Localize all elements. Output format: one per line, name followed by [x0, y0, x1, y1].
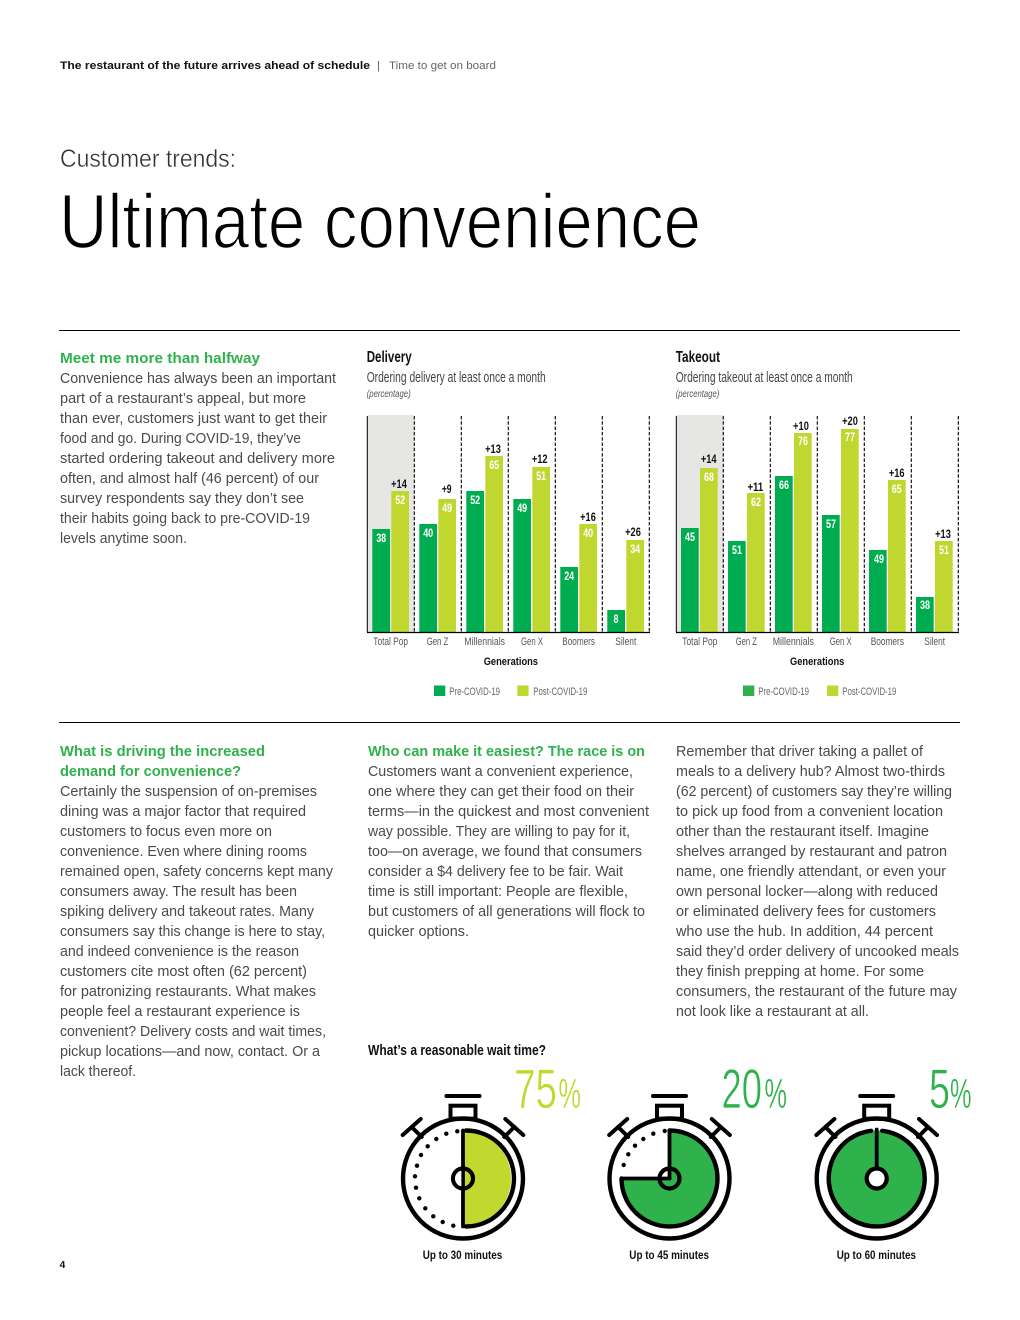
page header: The restaurant of the future arrives ahead of schedule	[60, 60, 370, 72]
axis title: Generations	[790, 656, 844, 668]
subtitle: Customer trends:	[60, 145, 236, 173]
body text: way possible. They are willing to pay for it,	[367, 824, 630, 840]
panel: pickup hub text: to pick up food from a convenient location	[676, 804, 943, 820]
body text: convenience. Even where dining rooms	[60, 844, 307, 860]
body text: their habits going back to pre-COVID-19	[60, 511, 310, 527]
body text: time is still important: People are flexible,	[368, 884, 628, 900]
heading: Meet me more than halfway	[60, 351, 260, 367]
body text: and indeed convenience is the reason	[60, 944, 299, 960]
panel: pickup hub text: other than the restaurant itself. Imagine	[676, 824, 929, 840]
panel: pickup hub text: consumers, the restaurant of the future may	[676, 984, 958, 1000]
legend	[434, 686, 587, 698]
heading: What is driving the increased	[60, 744, 265, 760]
body text: convenient? Delivery costs and wait times,	[60, 1024, 326, 1040]
panel: meet me more than halfway	[60, 351, 336, 547]
body text: dining was a major factor that required	[60, 804, 306, 820]
chart heading: Ordering takeout at least once a month	[676, 369, 853, 386]
wait time heading: What’s a reasonable wait time?	[368, 1042, 546, 1059]
axis labels: Gen X	[521, 636, 543, 648]
body text: remained open, safety concerns kept many	[60, 864, 334, 880]
legend: Post-COVID-19	[842, 686, 896, 698]
title: Ultimate convenience	[59, 179, 701, 265]
stat: 75 percent: 75	[514, 1057, 557, 1120]
bars: millennials: 52	[470, 493, 480, 507]
chart heading: Delivery	[367, 349, 412, 366]
bars: boomers: 24	[564, 569, 574, 583]
axis labels	[682, 636, 945, 648]
body text: started ordering takeout and delivery more	[60, 451, 335, 467]
body text	[367, 764, 649, 940]
axis labels: Boomers	[871, 636, 904, 648]
panel: pickup hub text: (62 percent) of customers say they’re willing	[676, 784, 952, 800]
bars: millennials	[466, 442, 503, 632]
stat: 75 percent: %	[558, 1070, 581, 1117]
chart heading: (percentage)	[367, 388, 411, 400]
panel: pickup hub text: shelves arranged by restaurant and patron	[676, 844, 947, 860]
axis title: Generations	[484, 656, 538, 668]
bars: gen x: 51	[536, 469, 546, 483]
body text: lack thereof.	[60, 1064, 136, 1080]
bars: total pop: 52	[395, 493, 405, 507]
panel: pickup hub text	[675, 744, 959, 1020]
icon: stopwatch 45 minutes	[609, 1096, 730, 1238]
axis labels: Millennials	[773, 636, 814, 648]
heading: demand for convenience?	[60, 764, 241, 780]
axis labels: Silent	[615, 636, 636, 648]
body text: consumers say this change is here to stay,	[60, 924, 325, 940]
bars: total pop: 68	[704, 470, 714, 484]
panel: what is driving demand	[60, 744, 334, 1080]
bars: boomers	[869, 466, 906, 632]
label: up to 60 minutes: Up to 60 minutes	[837, 1248, 916, 1262]
stat: 5 percent: %	[950, 1070, 972, 1117]
bars: boomers: +16	[889, 466, 905, 480]
panel: pickup hub text: Remember that driver taking a pallet of	[676, 744, 924, 760]
bars: gen x: 57	[826, 517, 836, 531]
body text: food and go. During COVID-19, they’ve	[60, 431, 301, 447]
axis labels: Silent	[924, 636, 945, 648]
panel: pickup hub text: own personal locker—along with reduced	[676, 884, 938, 900]
body text: levels anytime soon.	[60, 531, 187, 547]
body text: Customers want a convenient experience,	[368, 764, 633, 780]
stat: 5 percent: 5	[929, 1057, 950, 1120]
panel: pickup hub text: meals to a delivery hub? Almost two-thirds	[676, 764, 945, 780]
label: up to 30 minutes: Up to 30 minutes	[423, 1248, 503, 1262]
panel: who can make it easiest	[367, 744, 649, 940]
panel: pickup hub text: said they’d order delivery of uncooked meals	[676, 944, 959, 960]
bars: millennials	[775, 419, 812, 632]
bars: boomers: 49	[874, 552, 884, 566]
bars: boomers: +16	[580, 510, 596, 524]
chart heading	[676, 349, 853, 400]
axis labels: Gen Z	[736, 636, 757, 648]
axis labels: Total Pop	[682, 636, 717, 648]
bars: gen z: +11	[747, 480, 763, 494]
bars: millennials: 65	[489, 458, 499, 472]
bars: silent: 34	[630, 542, 640, 556]
page number: 4	[60, 1259, 66, 1271]
bars: gen x: 77	[845, 430, 855, 444]
bars: gen z: 62	[751, 495, 761, 509]
legend: Post-COVID-19	[533, 686, 587, 698]
label: up to 45 minutes: Up to 45 minutes	[629, 1248, 709, 1262]
bars: boomers: 65	[892, 482, 902, 496]
panel: pickup hub text: not look like a restaurant at all.	[676, 1004, 869, 1020]
bars: millennials: +13	[485, 442, 501, 456]
axis labels: Gen Z	[427, 636, 448, 648]
bars: gen x	[513, 452, 550, 632]
body text: but customers of all generations will flock to	[368, 904, 645, 920]
body text: consumers away. The result has been	[60, 884, 297, 900]
axis labels: Millennials	[464, 636, 505, 648]
body text: Certainly the suspension of on-premises	[60, 784, 317, 800]
body text: spiking delivery and takeout rates. Many	[60, 904, 315, 920]
bars: total pop: +14	[391, 477, 407, 491]
bars: millennials: 66	[779, 478, 789, 492]
icon: stopwatch 30 minutes	[403, 1096, 523, 1238]
bars: silent: 51	[939, 543, 949, 557]
chart heading: Ordering delivery at least once a month	[367, 369, 546, 386]
bars: silent: 38	[920, 598, 930, 612]
body text: than ever, customers just want to get their	[60, 411, 327, 427]
bars: silent: +13	[935, 527, 951, 541]
bars: total pop	[372, 477, 409, 632]
panel: takeout chart	[676, 349, 959, 698]
body text: often, and almost half (46 percent) of our	[60, 471, 319, 487]
panel: pickup hub text: who use the hub. In addition, 44 percent	[675, 924, 933, 940]
heading: Who can make it easiest? The race is on	[368, 744, 645, 760]
legend: Pre-COVID-19	[758, 686, 809, 698]
bars: millennials: 76	[798, 434, 808, 448]
stat: 20 percent: %	[764, 1070, 787, 1117]
heading	[60, 744, 265, 780]
bars: total pop: +14	[701, 452, 717, 466]
axis labels: Total Pop	[373, 636, 408, 648]
bars: gen z: +9	[442, 482, 452, 496]
body text: one where they can get their food on their	[368, 784, 634, 800]
bars: silent	[916, 527, 953, 632]
body text: people feel a restaurant experience is	[60, 1004, 300, 1020]
body text	[60, 784, 334, 1080]
body text: part of a restaurant’s appeal, but more	[60, 391, 306, 407]
page header: |	[377, 60, 380, 72]
panel: pickup hub text: they finish prepping at home. For some	[676, 964, 924, 980]
chart heading: (percentage)	[676, 388, 719, 400]
body text: customers to focus even more on	[60, 824, 272, 840]
axis labels: Boomers	[562, 636, 595, 648]
body text: quicker options.	[368, 924, 469, 940]
bars: gen x: 49	[517, 501, 527, 515]
bars: total pop: 45	[685, 530, 695, 544]
bars: gen x: +20	[842, 414, 858, 428]
bars: gen z	[419, 482, 456, 632]
body text: pickup locations—and now, contact. Or a	[60, 1044, 321, 1060]
body text: survey respondents say they don’t see	[60, 491, 304, 507]
bars: gen x: +12	[532, 452, 548, 466]
body text: consider a $4 delivery fee to be fair. Wait	[368, 864, 623, 880]
bars: gen z: 40	[423, 526, 433, 540]
bars: silent: +26	[625, 525, 641, 539]
axis labels: Gen X	[830, 636, 852, 648]
page header	[60, 60, 496, 72]
panel: delivery chart	[367, 349, 650, 698]
body text: terms—in the quickest and most convenient	[368, 804, 649, 820]
bars: silent: 8	[614, 612, 619, 626]
bars: gen z: 51	[732, 543, 742, 557]
bars: gen z	[728, 480, 765, 632]
chart heading: Takeout	[676, 349, 720, 366]
axis labels	[373, 636, 636, 648]
body text: Convenience has always been an important	[60, 371, 336, 387]
chart heading	[367, 349, 546, 400]
stat: 20 percent: 20	[722, 1057, 762, 1120]
legend	[743, 686, 896, 698]
bars: total pop: 38	[376, 531, 386, 545]
bars: millennials: +10	[793, 419, 809, 433]
bars: total pop	[681, 452, 718, 632]
body text	[60, 371, 336, 547]
body text: for patronizing restaurants. What makes	[60, 984, 316, 1000]
panel: wait time	[368, 1042, 972, 1262]
bars: silent	[607, 525, 644, 632]
page header: Time to get on board	[389, 60, 496, 72]
icon: stopwatch 60 minutes	[816, 1096, 937, 1238]
panel: pickup hub text: name, one friendly attendant, or even your	[676, 864, 946, 880]
legend: Pre-COVID-19	[449, 686, 500, 698]
body text: customers cite most often (62 percent)	[60, 964, 307, 980]
body text: too—on average, we found that consumers	[368, 844, 642, 860]
panel: pickup hub text: or eliminated delivery fees for customers	[676, 904, 936, 920]
bars: boomers: 40	[583, 526, 593, 540]
bars: gen z: 49	[442, 501, 452, 515]
bars: gen x	[822, 414, 859, 632]
bars: boomers	[560, 510, 597, 632]
